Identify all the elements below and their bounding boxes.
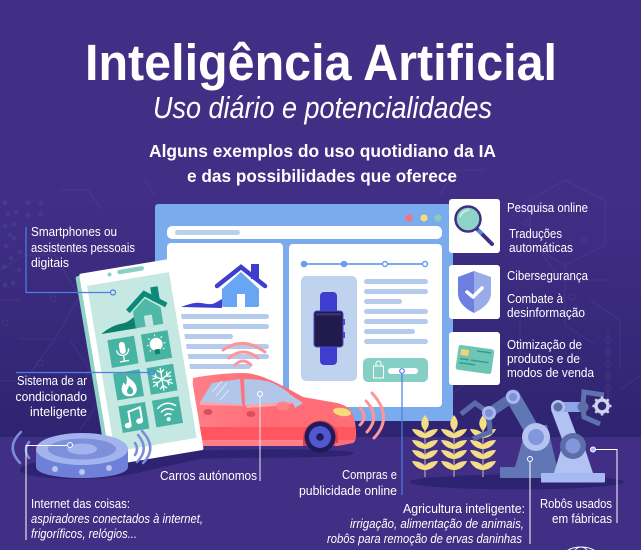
panel: left page: [167, 243, 283, 407]
callout: smartphones: assistentes pessoais: [31, 241, 135, 255]
labels: right column: modos de venda: [507, 366, 594, 380]
icon: flame tile: [113, 369, 144, 400]
callout: online shopping: publicidade online: [299, 484, 397, 498]
intro heading: e das possibilidades que oferece: [187, 166, 457, 186]
panel: browser window: [155, 204, 453, 421]
labels: right column: [507, 201, 594, 380]
icon: wifi tile: [152, 396, 183, 427]
callout: internet of things: frigoríficos, relógios...: [31, 527, 137, 541]
icon: microphone tile: [107, 336, 139, 368]
illustration: wheat field and robots shadow: [410, 474, 624, 490]
callout: smartphones: digitais: [31, 256, 69, 270]
icon: signal arcs: [13, 431, 150, 463]
labels: right column: Traduções: [509, 227, 562, 241]
callout: air conditioning: condicionado: [16, 390, 87, 404]
title: Inteligência Artificial: [85, 34, 557, 91]
callout: internet of things: aspiradores conectados à internet,: [31, 512, 203, 526]
window buttons: [405, 214, 442, 222]
icon: light bulb tile: [141, 330, 172, 362]
panel: search icon card: [449, 199, 500, 253]
wheel: [303, 420, 338, 452]
callout: air conditioning: Sistema de ar: [17, 374, 87, 388]
callout: factory robots: [540, 447, 617, 526]
illustration: light factory robot: [541, 392, 612, 482]
illustration: dark factory robot: [461, 390, 557, 478]
address bar: [167, 226, 442, 239]
labels: right column: Otimização de: [507, 338, 582, 352]
labels: right column: Pesquisa online: [507, 201, 588, 215]
callout: smart agriculture: [327, 456, 532, 546]
illustration: wheat: [412, 415, 496, 477]
intro heading: [149, 141, 496, 186]
labels: right column: automáticas: [509, 241, 573, 255]
illustration: self-driving car: [189, 343, 384, 452]
shadow under car and vacuum: [20, 449, 354, 479]
callout: air conditioning: inteligente: [30, 405, 87, 419]
callout: smartphones: [26, 225, 135, 295]
callout: internet of things: [26, 442, 203, 541]
callout: air conditioning: [16, 370, 154, 419]
icon: house: [95, 285, 169, 334]
logo: globe top edge: [561, 547, 601, 550]
icon: house: [181, 264, 265, 308]
callout: smart agriculture: robôs para remoção de ervas daninhas: [327, 532, 522, 546]
buy button: [363, 358, 428, 382]
panel: payment card icon: [449, 332, 500, 385]
callout: smartphones: Smartphones ou: [31, 225, 117, 239]
labels: right column: Combate à: [507, 292, 563, 306]
labels: right column: produtos e de: [507, 352, 580, 366]
callout: online shopping: Compras e: [342, 468, 397, 482]
panel: shield icon card: [449, 265, 500, 319]
callout: factory robots: Robôs usados: [540, 497, 612, 511]
intro heading: Alguns exemplos do uso quotidiano da IA: [149, 141, 496, 161]
illustration: smartphone: [75, 258, 204, 466]
callout: smart agriculture: Agricultura inteligente:: [403, 502, 525, 516]
callout: autonomous cars: [160, 392, 262, 483]
illustration: robot vacuum: [13, 431, 150, 478]
icon: gear: [592, 396, 612, 416]
callout: factory robots: em fábricas: [552, 512, 612, 526]
subtitle: Uso diário e potencialidades: [153, 90, 492, 125]
icon: wifi signal front: [360, 393, 384, 438]
callout: autonomous cars: Carros autónomos: [160, 469, 257, 483]
icon: music note tile: [118, 402, 149, 433]
callout: smart agriculture: irrigação, alimentação de animais,: [350, 517, 524, 531]
progress steps: [301, 261, 428, 267]
labels: right column: desinformação: [507, 306, 585, 320]
icon: wifi signal on car: [223, 343, 265, 365]
callout: internet of things: Internet das coisas:: [31, 497, 130, 511]
labels: right column: Cibersegurança: [507, 269, 588, 283]
icon: smartwatch: [301, 276, 357, 381]
icon: snowflake tile: [146, 364, 178, 395]
text lines: [172, 314, 269, 369]
panel: right page: [289, 244, 442, 407]
callout: online shopping: [299, 369, 404, 498]
text lines: [364, 279, 428, 344]
